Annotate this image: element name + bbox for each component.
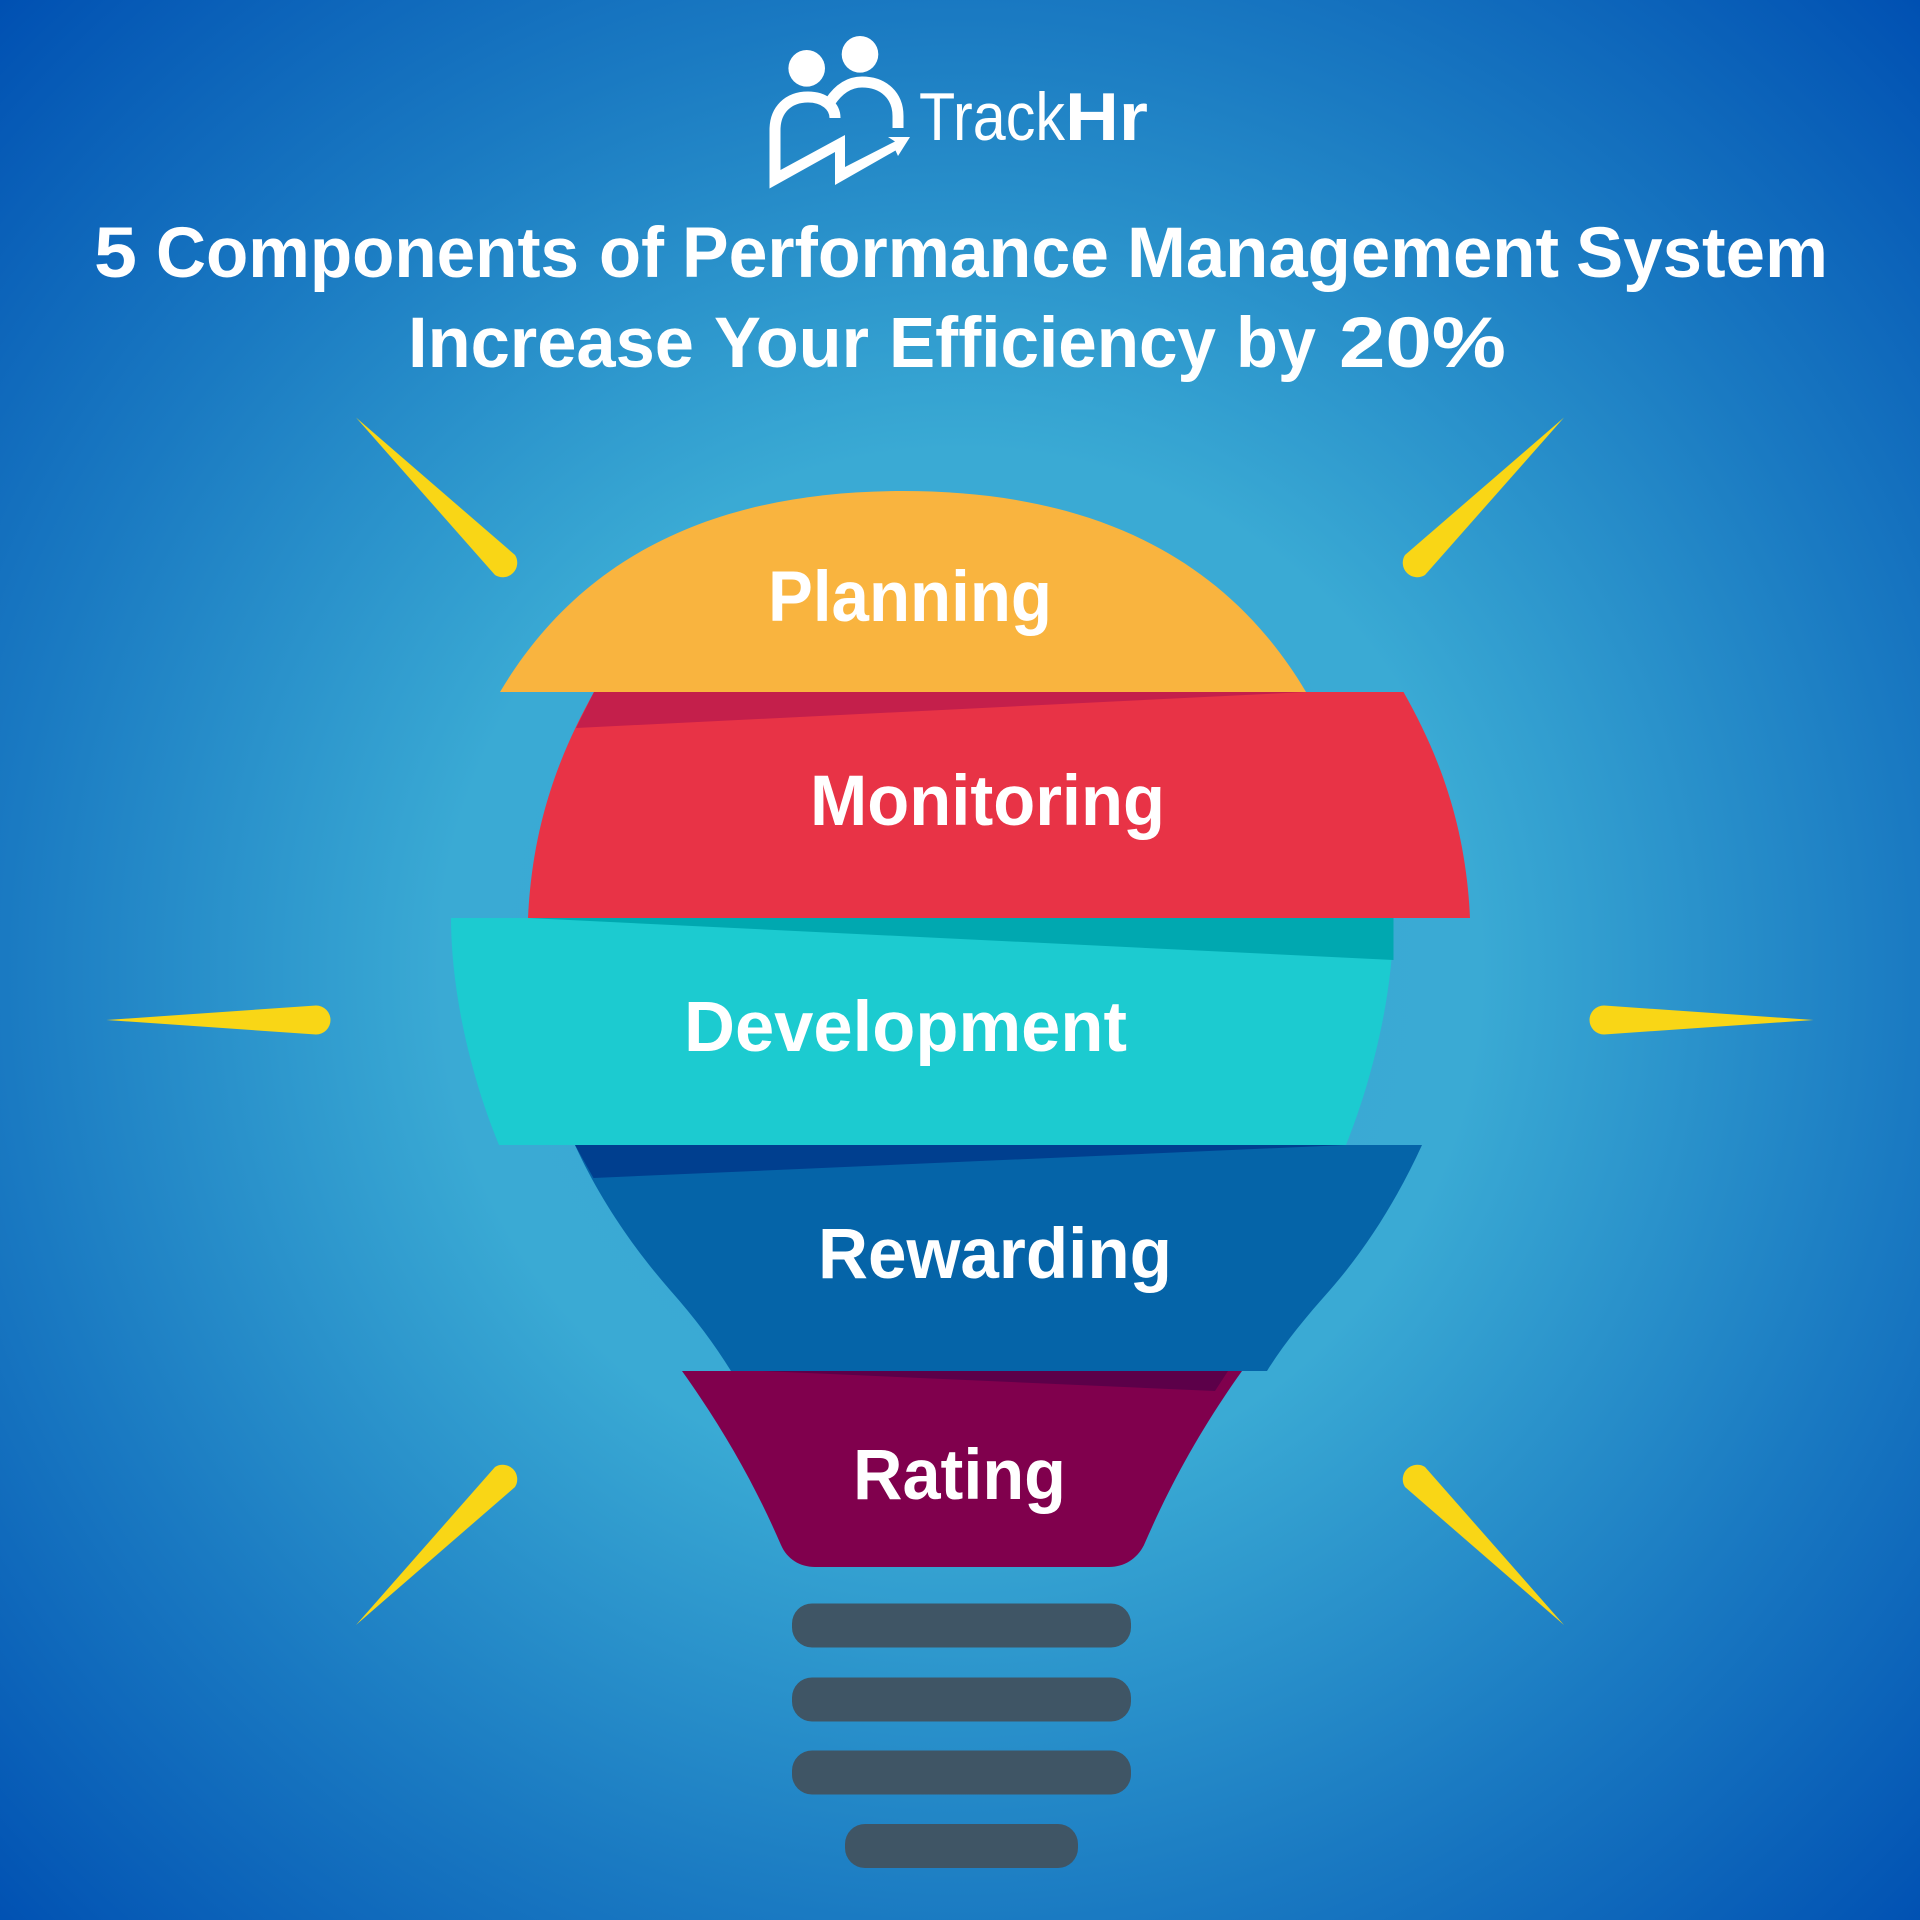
ray: top left [356, 418, 517, 577]
title line 2: Increase [408, 304, 694, 383]
bulb segment: Rating [682, 1371, 1242, 1567]
bulb segment: Planning [500, 491, 1306, 692]
icon: person right head [842, 36, 878, 73]
ray: bottom left [356, 1465, 517, 1625]
title line 1: Components [156, 214, 579, 293]
icon: person right body [830, 82, 898, 128]
base bar 1 [792, 1604, 1131, 1648]
label: Rewarding: Rewarding [818, 1215, 1172, 1294]
label: Planning: Planning [768, 558, 1052, 637]
base bar 4 [845, 1824, 1078, 1868]
label: Rating: Rating [853, 1436, 1066, 1515]
light rays [106, 418, 1814, 1625]
title line 1: Management [1127, 214, 1559, 293]
shadow: Rating [762, 1371, 1228, 1391]
ray: right [1590, 1006, 1814, 1034]
shadow: Rewarding [575, 1145, 1346, 1178]
bulb base [792, 1604, 1131, 1868]
shadow: Development [528, 918, 1394, 960]
title line 2: Efficiency [889, 304, 1216, 383]
title line 2 [408, 304, 1506, 383]
title [94, 214, 1828, 383]
title line 2: 20% [1339, 304, 1506, 383]
label: Monitoring: Monitoring [810, 762, 1165, 841]
shadow: Monitoring [576, 692, 1306, 728]
title line 1: of [599, 214, 664, 293]
icon: person left head [788, 50, 825, 87]
title line 2: by [1236, 304, 1316, 383]
title line 1: System [1576, 214, 1828, 293]
ray: top right [1403, 418, 1564, 577]
ray: bottom right [1403, 1465, 1564, 1625]
logo text Track: Track [919, 79, 1066, 155]
base bar 3 [792, 1750, 1131, 1794]
icon: growth arrow [770, 135, 910, 188]
title line 1: Performance [682, 214, 1109, 293]
icon: person left body [775, 97, 835, 172]
title line 2: Your [714, 304, 869, 383]
bulb segment: Rewarding [575, 1145, 1422, 1371]
ray: left [106, 1006, 330, 1034]
bulb segment: Monitoring [528, 692, 1470, 918]
logo text Hr: Hr [1065, 79, 1148, 155]
label: Development: Development [684, 988, 1127, 1067]
title line 1: 5 [94, 214, 137, 293]
logo: TrackHr [770, 36, 1148, 188]
title line 1 [94, 214, 1828, 293]
base bar 2 [792, 1678, 1131, 1722]
bulb segment: Development [451, 918, 1394, 1145]
